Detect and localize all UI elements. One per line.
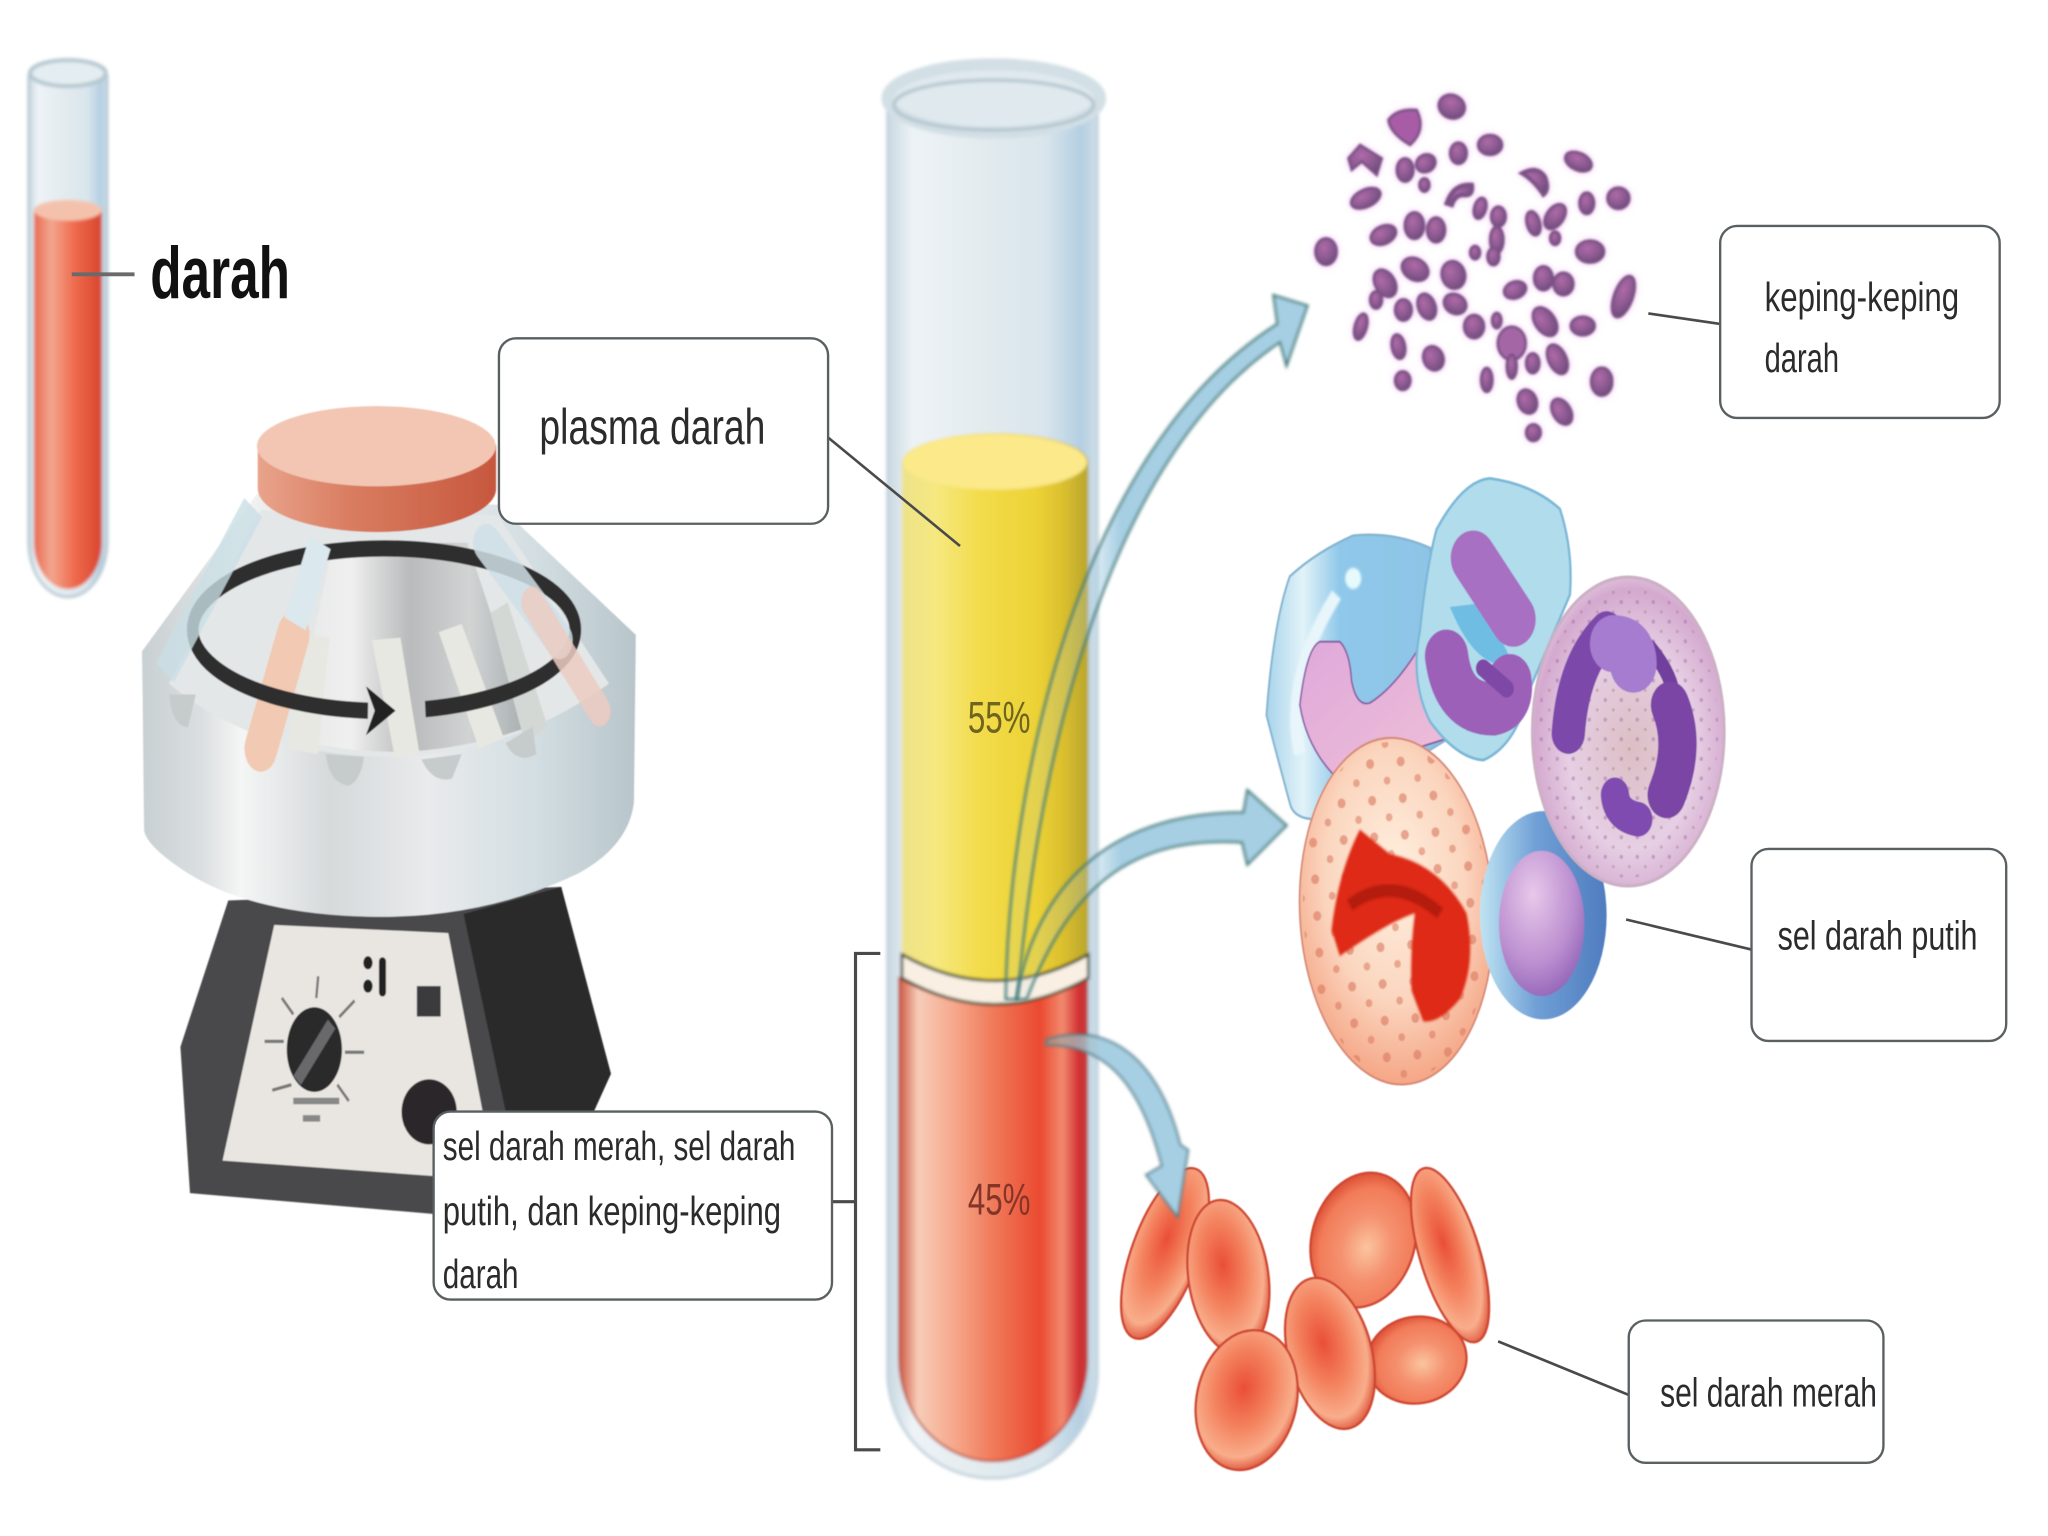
centrifuge tube far left <box>165 507 253 673</box>
centrifuge base right face <box>464 887 611 1112</box>
callout: sel darah merah <box>1629 1320 1883 1463</box>
small tube blood surface <box>34 200 102 221</box>
monocyte blue cell <box>1266 535 1450 819</box>
slot bars <box>288 602 548 757</box>
right dial <box>402 1079 457 1144</box>
label darah: darah <box>150 233 290 314</box>
45 percent label: 45% <box>968 1176 1031 1225</box>
small test tube of whole blood <box>29 60 107 597</box>
lymphocyte nucleus <box>1499 851 1584 996</box>
rotation arrow <box>193 548 575 735</box>
callout: plasma darah: plasma darah <box>539 399 765 455</box>
eosinophil red granulocyte <box>1290 730 1503 1093</box>
small tube blood <box>34 209 102 589</box>
small tube rim <box>30 60 106 86</box>
left dial <box>287 1007 342 1092</box>
lid side <box>258 445 496 532</box>
power switch <box>417 986 441 1016</box>
dial ticks <box>265 976 364 1101</box>
callout: keping-keping darah: keping-keping <box>1765 274 1959 320</box>
basophil nucleus <box>1568 631 1678 819</box>
callout: sel darah putih <box>1752 849 2006 1041</box>
monocyte nucleus <box>1300 642 1450 774</box>
basophil pink cell <box>1532 577 1724 886</box>
platelets cluster <box>1315 90 1640 441</box>
neutrophil nucleus lobes <box>1447 558 1513 709</box>
callout: keping-keping darah <box>1720 226 2000 418</box>
callout: sel darah merah: sel darah merah <box>1660 1370 1877 1416</box>
lid top <box>257 406 496 486</box>
55 percent label: 55% <box>968 694 1031 743</box>
dial caption <box>293 1101 339 1118</box>
centrifuge machine <box>142 406 636 1215</box>
red blood cells <box>1103 1157 1505 1480</box>
leader line platelets <box>1648 313 1720 324</box>
tube glass <box>887 98 1098 1478</box>
red blood cell layer <box>899 978 1087 1461</box>
glass dome interior <box>169 510 609 757</box>
callout: sel darah merah, sel darah putih, dan keping-keping darah: sel darah merah, sel darah <box>443 1123 795 1169</box>
silver cone <box>291 543 529 752</box>
leader line for darah <box>72 273 135 276</box>
centrifuge housing <box>142 494 636 917</box>
callout: sel darah merah, sel darah putih, dan keping-keping darah: putih, dan keping-keping <box>443 1188 781 1234</box>
centrifuge tube right <box>487 543 599 711</box>
arrow to red blood cells <box>1046 1035 1188 1217</box>
control panel <box>222 925 483 1180</box>
callout: sel darah putih: sel darah putih <box>1778 913 1977 959</box>
buffy coat band <box>902 954 1088 1004</box>
leader line white cells <box>1626 920 1752 950</box>
plasma surface <box>903 435 1087 490</box>
small tube glass <box>29 76 107 597</box>
centrifuge tube left lower <box>261 635 293 749</box>
bracket for cellular layer <box>832 953 880 1450</box>
tube rim <box>887 64 1100 133</box>
white blood cells <box>1266 478 1724 1093</box>
rim pockets <box>169 694 536 786</box>
indicator lights <box>363 956 386 996</box>
callout: sel darah merah, sel darah putih, dan keping-keping darah <box>434 1112 832 1300</box>
leader line red cells <box>1498 1341 1629 1395</box>
callout: sel darah merah, sel darah putih, dan keping-keping darah: darah <box>443 1251 519 1297</box>
large test tube <box>887 64 1100 1478</box>
band top line <box>902 954 1088 981</box>
centrifuge base left face <box>180 887 611 1215</box>
arrow to platelets <box>1006 295 1307 999</box>
callout: keping-keping darah: darah <box>1765 335 1839 381</box>
lymphocyte small cell <box>1480 811 1607 1019</box>
neutrophil transparent cell <box>1417 478 1571 760</box>
leader line plasma <box>828 438 960 546</box>
callout: plasma darah <box>499 338 828 524</box>
arrow to white blood cells <box>1016 790 1287 999</box>
plasma layer <box>902 433 1088 981</box>
eosinophil nucleus <box>1332 830 1470 1022</box>
centrifuge tube left upper <box>295 543 320 624</box>
